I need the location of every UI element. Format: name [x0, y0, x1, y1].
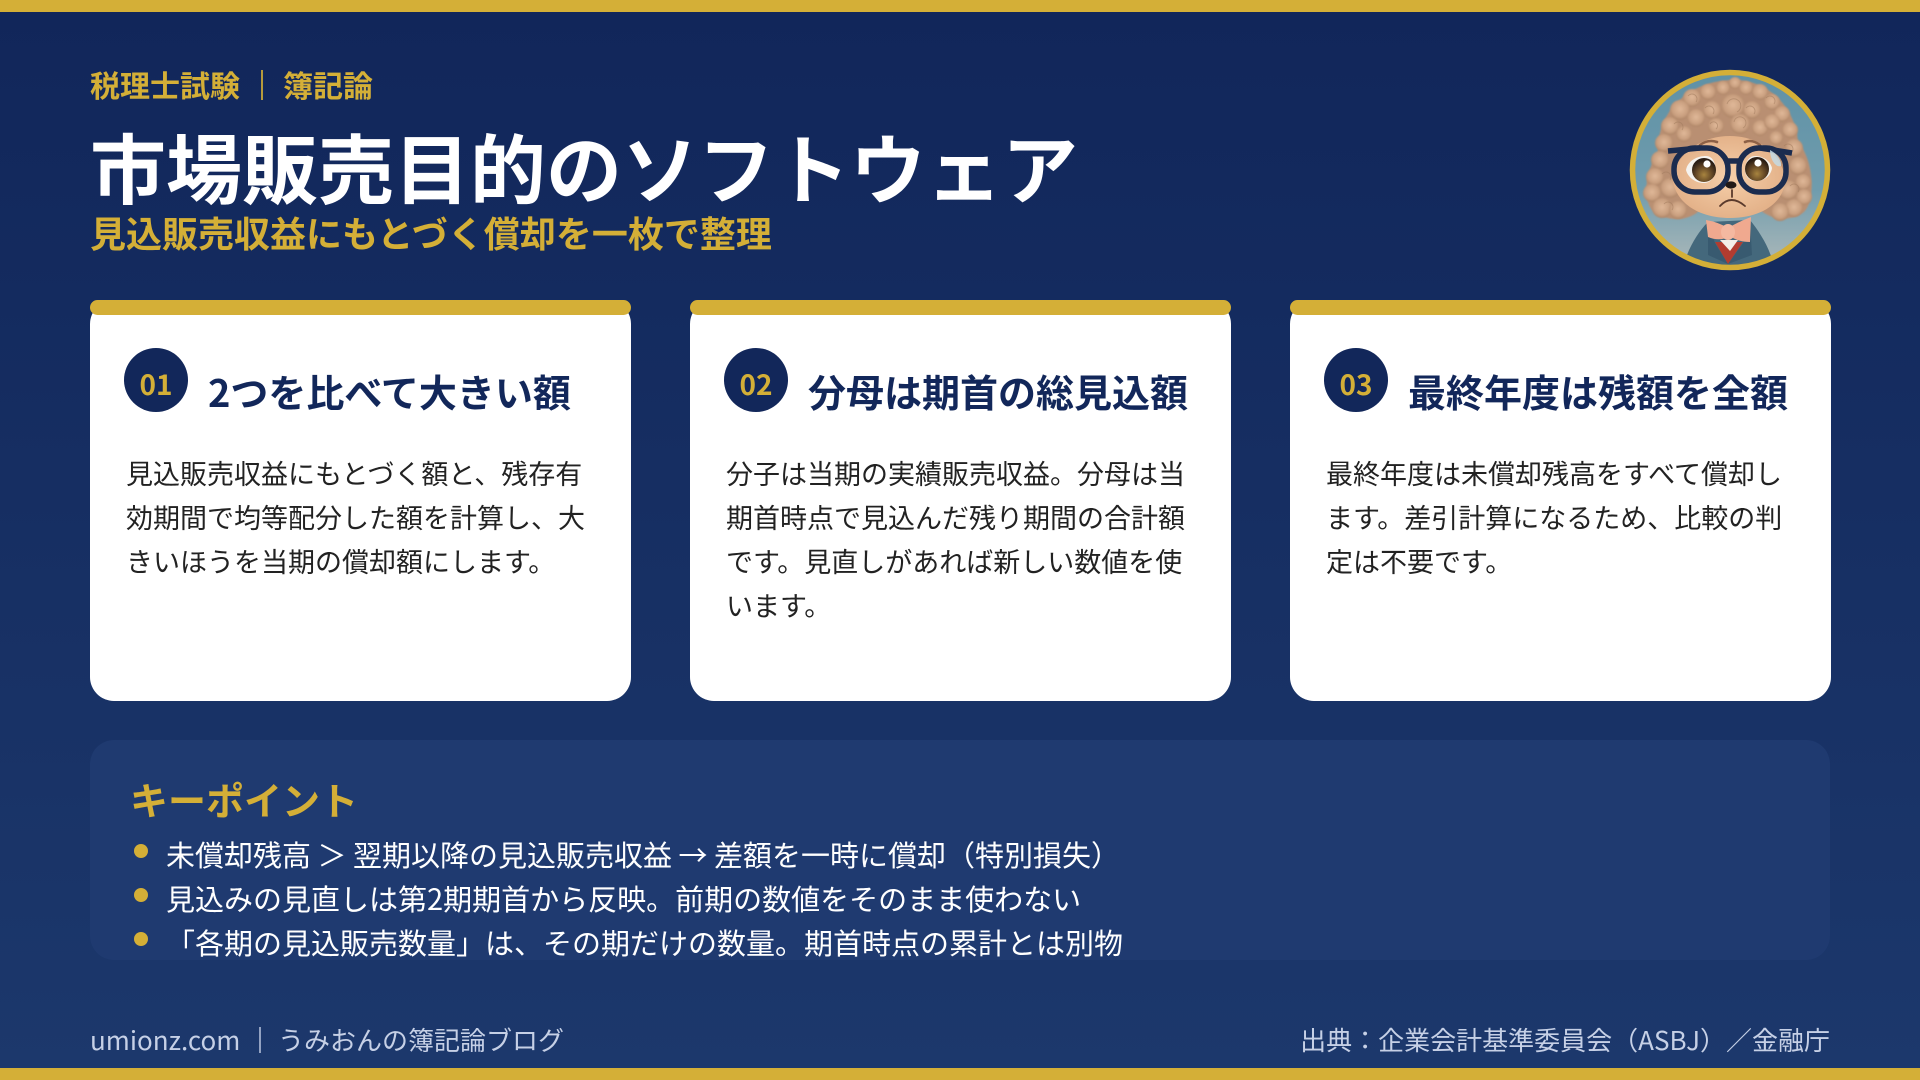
number badge 03 [1324, 348, 1388, 412]
accent bar [690, 300, 1230, 315]
title: 市場販売目的のソフトウェア [90, 110, 1078, 220]
card body text: 定は不要です。 [1326, 540, 1512, 580]
top gold bar [0, 0, 1920, 12]
hair mass [1646, 80, 1812, 219]
curl swirls [1662, 94, 1799, 210]
footer left: site name [90, 1021, 564, 1058]
bullet 2 [134, 888, 148, 902]
bottom gold bar [0, 1068, 1920, 1080]
eyes [1686, 156, 1715, 183]
footer left: site name: うみおんの簿記論ブログ [278, 1021, 564, 1058]
subtitle: 見込販売収益にもとづく償却を一枚で整理 [90, 206, 772, 258]
card body text: 最終年度は未償却残高をすべて償却し [1326, 452, 1782, 492]
card body text: 効期間で均等配分した額を計算し、大 [126, 496, 585, 536]
card body text: です。見直しがあれば新しい数値を使 [726, 540, 1182, 580]
eyebrow label: 税理士試験 [90, 62, 240, 106]
footer right: source: 出典：企業会計基準委員会（ASBJ）／金融庁 [1300, 1021, 1830, 1058]
card body text [126, 452, 585, 580]
number badge 02: 02 [739, 364, 773, 404]
glasses [1668, 148, 1792, 192]
card body text [1326, 452, 1782, 580]
point 2: 見込みの見直しは第2期期首から反映。前期の数値をそのまま使わない [166, 877, 1081, 919]
face [1673, 136, 1785, 218]
accent bar [90, 300, 630, 315]
card body text: 分子は当期の実績販売収益。分母は当 [726, 452, 1185, 492]
nose [1726, 181, 1736, 189]
number badge 02 [724, 348, 788, 412]
eyebrow label [90, 62, 373, 106]
bow tie [1706, 217, 1751, 242]
panel: card 2 [690, 300, 1230, 700]
brows [1700, 141, 1760, 145]
card heading: 最終年度は残額を全額 [1408, 363, 1788, 418]
key points heading: キーポイント [130, 771, 358, 826]
icon: character avatar with curly hair and glasses [1630, 70, 1830, 270]
card body text: 見込販売収益にもとづく額と、残存有 [126, 452, 582, 492]
point 3: 「各期の見込販売数量」は、その期だけの数量。期首時点の累計とは別物 [166, 921, 1123, 963]
jacket [1687, 220, 1771, 265]
accent bar [1290, 300, 1830, 315]
number badge 03: 03 [1339, 364, 1373, 404]
number badge 01 [124, 348, 188, 412]
bullet 3 [134, 932, 148, 946]
number badge 01: 01 [139, 364, 173, 404]
panel: key points [90, 740, 1830, 960]
card body text: ます。差引計算になるため、比較の判 [1326, 496, 1782, 536]
bullet 1 [134, 844, 148, 858]
card body text: きいほうを当期の償却額にします。 [126, 540, 555, 580]
card heading: 2つを比べて大きい額 [208, 363, 571, 418]
vest [1715, 242, 1743, 264]
panel: card 3 [1290, 300, 1830, 700]
panel: card 1 [90, 300, 630, 700]
mouth [1720, 190, 1745, 206]
card heading: 分母は期首の総見込額 [808, 363, 1188, 418]
eyebrow label: 簿記論 [283, 62, 373, 106]
card body text: 期首時点で見込んだ残り期間の合計額 [726, 496, 1185, 536]
point 1: 未償却残高 ＞ 翌期以降の見込販売収益 → 差額を一時に償却（特別損失） [166, 833, 1120, 875]
footer left: site name: umionz.com [90, 1021, 240, 1058]
card body text [726, 452, 1185, 624]
card body text: います。 [726, 584, 831, 624]
